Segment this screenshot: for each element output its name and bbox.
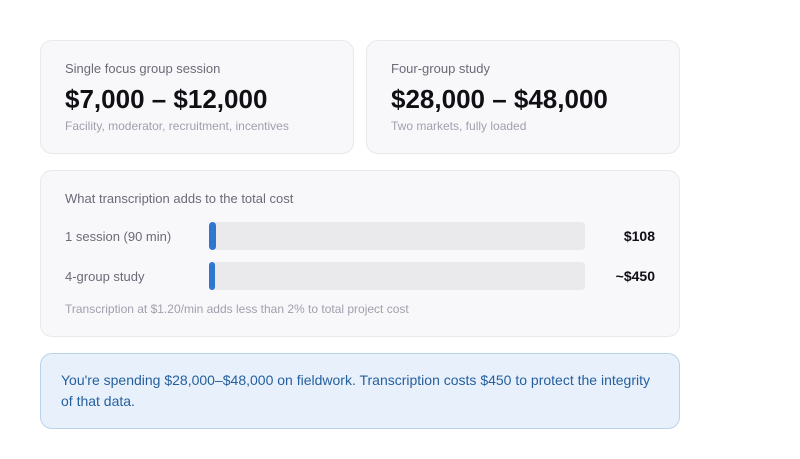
row label: 1 session: 1 session (90 min) — [65, 229, 171, 244]
amount: 1 session: $108 — [624, 228, 655, 244]
value: single session cost range: $7,000 – $12,000 — [65, 84, 267, 114]
panel: single session cost — [40, 40, 354, 154]
chart footnote: Transcription at $1.20/min adds less than 2% to total project cost — [65, 302, 409, 316]
note: four-group study scope: Two markets, fully loaded — [391, 119, 526, 133]
label: four-group study: Four-group study — [391, 61, 490, 76]
amount: 4-group study: ~$450 — [616, 268, 655, 284]
bar fill: 1 session — [209, 222, 216, 250]
value: four-group cost range: $28,000 – $48,000 — [391, 84, 608, 114]
note: single session cost items: Facility, moderator, recruitment, incentives — [65, 119, 289, 133]
label: single session: Single focus group session — [65, 61, 220, 76]
chart heading: What transcription adds to the total cost — [65, 191, 293, 206]
callout: fieldwork versus transcription — [40, 353, 680, 429]
row label: 4-group study: 4-group study — [65, 269, 144, 284]
bar: 4-group study — [209, 262, 585, 290]
callout text: You're spending $28,000–$48,000 on fieldwork. Transcription costs $450 to protect the integrity of that data. — [61, 372, 650, 409]
bar fill: 4-group study — [209, 262, 214, 290]
panel: transcription cost bar chart — [40, 170, 680, 337]
panel: four-group study cost — [366, 40, 680, 154]
bar: 1 session — [209, 222, 585, 250]
